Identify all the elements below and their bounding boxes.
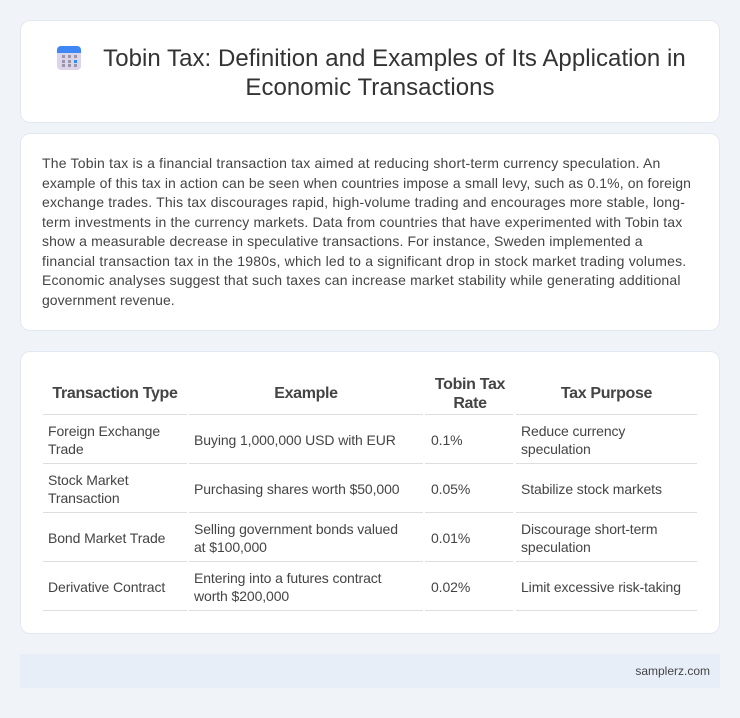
row: derivative contract: 0.02% <box>431 579 470 595</box>
row: bond market trade: speculation <box>521 539 591 555</box>
row: stock market transaction: Stabilize stock markets <box>521 481 662 497</box>
text block: description: government revenue. <box>42 292 175 308</box>
row: derivative contract: Entering into a futures contract <box>194 570 381 586</box>
table <box>43 376 697 611</box>
row: derivative contract <box>48 570 681 604</box>
row: foreign exchange trade: speculation <box>521 441 591 457</box>
row: foreign exchange trade: Reduce currency <box>521 423 625 439</box>
row: bond market trade: Discourage short-term <box>521 521 657 537</box>
row: bond market trade: Selling government bonds valued <box>194 521 398 537</box>
row: derivative contract: worth $200,000 <box>194 588 289 604</box>
row: stock market transaction: 0.05% <box>431 481 470 497</box>
title <box>103 45 686 101</box>
footer <box>20 654 720 688</box>
row: derivative contract: Limit excessive risk-taking <box>521 579 681 595</box>
row: stock market transaction: Stock Market <box>48 472 128 488</box>
row: stock market transaction <box>48 472 662 506</box>
footer source text: samplerz.com <box>635 664 710 678</box>
table header: Tax Purpose <box>561 385 652 402</box>
panel: table card <box>20 351 720 634</box>
table header: Rate <box>453 395 487 412</box>
text block: description: show a measurable decrease in speculative transactions. For instance, Sweden implemented a <box>42 233 643 249</box>
text block: description: Economic analyses suggest that such taxes can increase market stability while generating additional <box>42 272 681 288</box>
title: Tobin Tax: Definition and Examples of Its Application in <box>103 45 686 72</box>
row: foreign exchange trade: Buying 1,000,000 USD with EUR <box>194 432 396 448</box>
text block: description: The Tobin tax is a financial transaction tax aimed at reducing short-term currency speculation. An <box>42 155 661 171</box>
row: bond market trade: 0.01% <box>431 530 470 546</box>
table header: Transaction Type <box>52 385 178 402</box>
panel: description card <box>20 133 720 331</box>
text block: description: example of this tax in action can be seen when countries impose a small levy, such as 0.1%, on foreign <box>42 175 691 191</box>
row: derivative contract: Derivative Contract <box>48 579 165 595</box>
row: foreign exchange trade: Foreign Exchange <box>48 423 160 439</box>
row: stock market transaction: Transaction <box>48 490 120 506</box>
row: bond market trade: at $100,000 <box>194 539 267 555</box>
title: Economic Transactions <box>245 74 495 101</box>
panel: title card <box>20 20 720 123</box>
text block: description: exchange trades. This tax discourages rapid, high-volume trading and encourages more stable, long- <box>42 194 685 210</box>
row: foreign exchange trade: Trade <box>48 441 84 457</box>
text block: description: financial transaction tax in the 1980s, which led to a significant drop in stock market trading volumes. <box>42 253 686 269</box>
row: stock market transaction: Purchasing shares worth $50,000 <box>194 481 399 497</box>
text block: description <box>42 155 691 308</box>
table header: Example <box>274 385 338 402</box>
row: bond market trade <box>48 521 657 555</box>
row: foreign exchange trade <box>48 423 626 457</box>
text block: description: term investments in the currency markets. Data from countries that have experimented with Tobin tax <box>42 214 682 230</box>
table header <box>52 376 652 412</box>
icon: calendar <box>57 46 81 70</box>
row: bond market trade: Bond Market Trade <box>48 530 165 546</box>
table header: Tobin Tax <box>435 376 505 393</box>
row: foreign exchange trade: 0.1% <box>431 432 463 448</box>
